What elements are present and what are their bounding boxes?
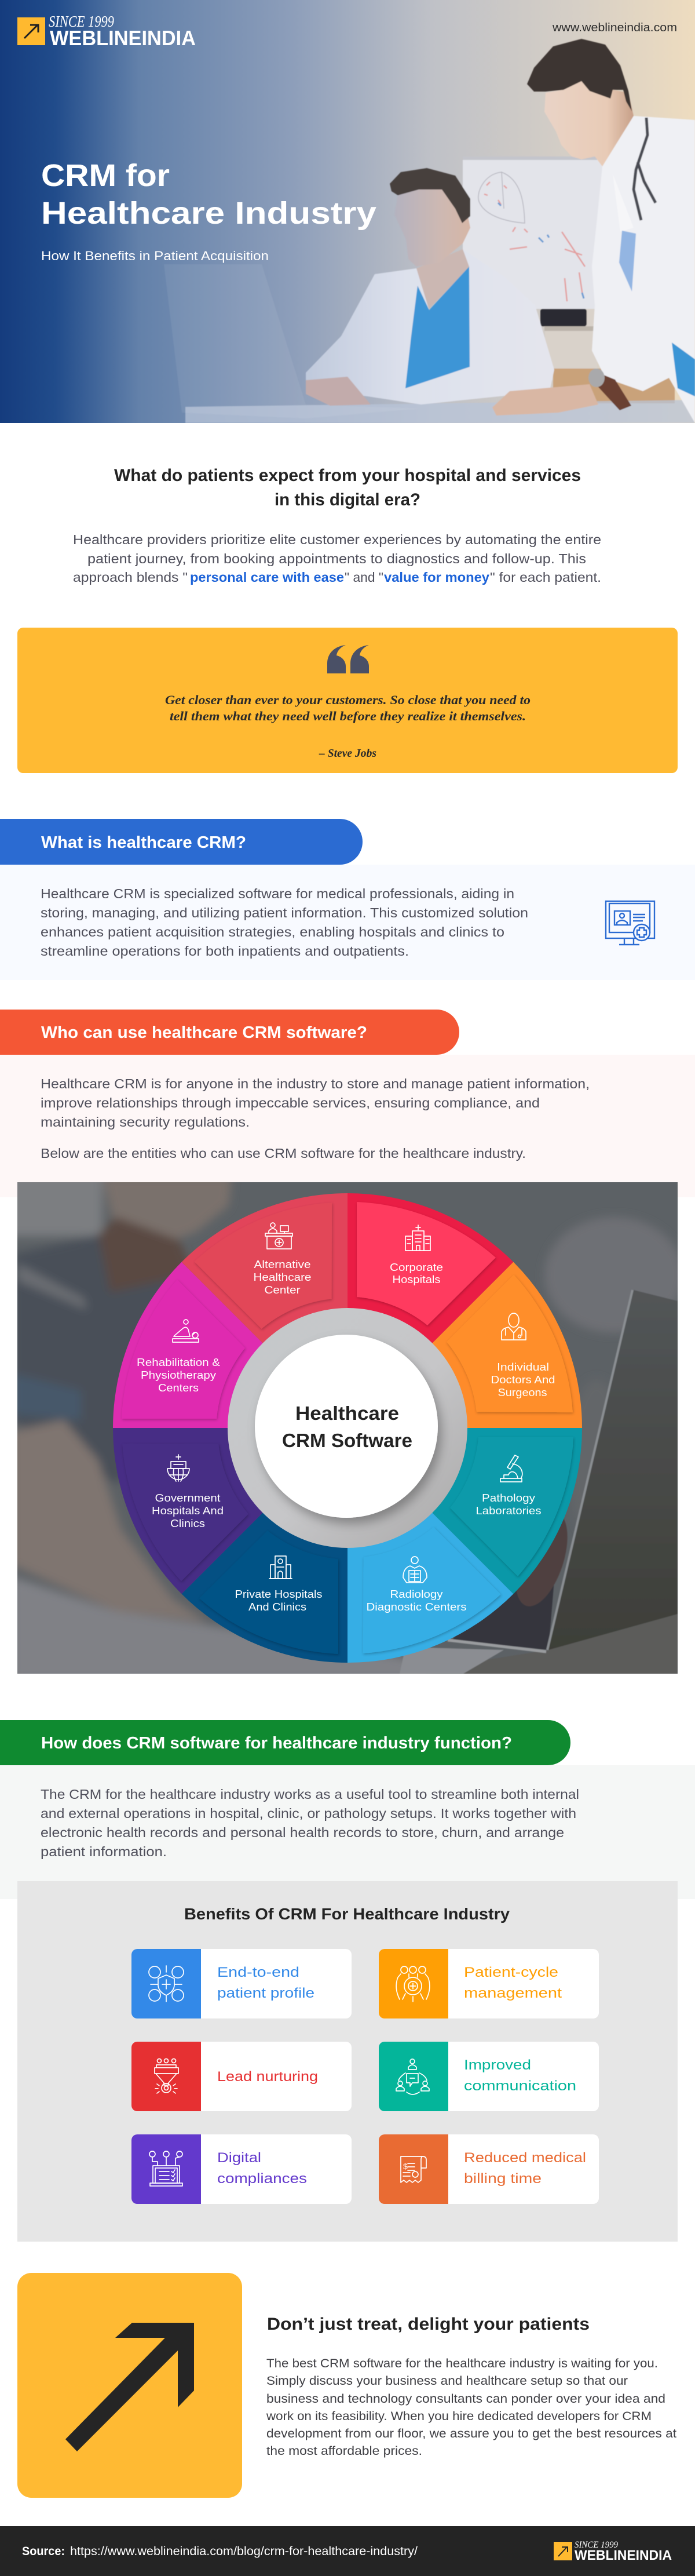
body text (41, 1076, 590, 1161)
intro heading (114, 466, 581, 509)
hub disc (255, 1335, 438, 1518)
icon: arrow (65, 2323, 194, 2451)
closing paragraph: the most affordable prices. (266, 2444, 422, 2458)
icon: lead funnel (155, 2058, 178, 2093)
photo backdrop: doctor with laptop (6, 1171, 683, 1681)
label: government hospitals and clinics (152, 1492, 224, 1529)
icon: quotation mark (327, 645, 369, 673)
body text: Healthcare CRM is for anyone in the industry to store and manage patient information, (41, 1076, 590, 1091)
body text: electronic health records and personal health records to store, churn, and arrange (41, 1825, 564, 1840)
wedge: private hospitals (182, 1428, 348, 1663)
panel: benefits of CRM (17, 1881, 678, 2242)
logo wordmark (49, 16, 195, 45)
body text: Below are the entities who can use CRM software for the healthcare industry. (41, 1146, 526, 1161)
footer logo wordmark (575, 2540, 672, 2563)
intro paragraph: value for money (384, 570, 489, 585)
card text: compliances (217, 2171, 307, 2187)
label: alternative healthcare center: Center (264, 1284, 301, 1296)
heading pill (0, 1720, 570, 1765)
panel: who can use healthcare CRM (0, 1010, 695, 1197)
label: private hospitals and clinics: Private Hospitals (235, 1588, 322, 1600)
label: pathology laboratories (476, 1492, 541, 1517)
card text (464, 1965, 562, 2001)
wedge: government (113, 1428, 348, 1594)
card text: billing time (464, 2171, 542, 2187)
closing paragraph: business and technology consultants can ponder over your idea and (266, 2392, 665, 2406)
body text: streamline operations for both inpatients and outpatients. (41, 943, 409, 959)
card: reduced medical billing time (379, 2134, 599, 2204)
intro heading: What do patients expect from your hospital and services (114, 466, 581, 485)
closing paragraph: Simply discuss your business and healthcare setup so that our (266, 2374, 628, 2388)
label: radiology diagnostic centers (366, 1588, 467, 1613)
card text (217, 1965, 314, 2001)
hero title: Healthcare Industry (41, 196, 376, 231)
footer logo tile (554, 2542, 572, 2560)
footer logo wordmark: SINCE 1999 (575, 2540, 618, 2550)
hero title: CRM for (41, 158, 170, 193)
intro heading: in this digital era? (275, 490, 420, 509)
wheel chart: healthcare CRM software (83, 1163, 612, 1693)
intro paragraph: Healthcare providers prioritize elite customer experiences by automating the entire (73, 532, 601, 547)
footer logo wordmark: WEBLINEINDIA (575, 2548, 672, 2563)
section heading: What is healthcare CRM? (41, 833, 246, 852)
card text: Lead nurturing (217, 2069, 318, 2085)
wedge: individual doctors (348, 1262, 582, 1428)
body text: enhances patient acquisition strategies, enabling hospitals and clinics to (41, 924, 504, 939)
label: rehabilitation and physiotherapy centers: Centers (158, 1382, 199, 1394)
label: alternative healthcare center (254, 1259, 312, 1296)
label: individual doctors and surgeons: Surgeons (498, 1387, 547, 1398)
panel: what is healthcare CRM (0, 819, 695, 980)
label: pathology laboratories: Pathology (482, 1492, 535, 1504)
logo: yellow arrow tile (17, 17, 45, 45)
card text (464, 2057, 576, 2094)
panel: yellow arrow tile (17, 2273, 242, 2498)
card: end-to-end patient profile (131, 1949, 352, 2018)
card: improved communication (379, 2042, 599, 2111)
heading pill (0, 819, 363, 865)
label: individual doctors and surgeons (491, 1361, 555, 1398)
body text: maintaining security regulations. (41, 1114, 250, 1129)
card text: End-to-end (217, 1965, 299, 1980)
benefits heading: Benefits Of CRM For Healthcare Industry (184, 1905, 510, 1923)
card: digital compliances (131, 2134, 352, 2204)
panel: how CRM functions (0, 1720, 695, 1899)
card: lead nurturing (131, 2042, 352, 2111)
icon: digital checklist laptop (149, 2151, 182, 2186)
body text: storing, managing, and utilizing patient information. This customized solution (41, 905, 528, 920)
label: individual doctors and surgeons: Doctors And (491, 1374, 555, 1386)
source url: https://www.weblineindia.com/blog/crm-for-healthcare-industry/ (70, 2545, 418, 2558)
body text: improve relationships through impeccable services, ensuring compliance, and (41, 1095, 540, 1110)
label: government hospitals and clinics: Clinics (170, 1518, 205, 1529)
hero photo: doctors at a laptop (164, 39, 695, 423)
body text: Healthcare CRM is specialized software for medical professionals, aiding in (41, 886, 514, 901)
body text (41, 886, 528, 959)
quote attribution: – Steve Jobs (319, 747, 376, 760)
card: patient-cycle management (379, 1949, 599, 2018)
label: alternative healthcare center: Healthcare (254, 1271, 312, 1283)
intro paragraph: " for each patient. (490, 570, 601, 585)
hub ring (228, 1308, 467, 1548)
intro paragraph: personal care with ease (190, 570, 344, 585)
icon: patient network (149, 1966, 184, 2002)
wedge: alternative healthcare (182, 1193, 348, 1428)
source label: Source: (22, 2545, 65, 2558)
logo wordmark: SINCE 1999 (49, 13, 114, 30)
hub title: CRM Software (282, 1430, 412, 1451)
label: alternative healthcare center: Alternative (254, 1259, 310, 1270)
card text: management (464, 1985, 562, 2001)
closing paragraph (266, 2357, 676, 2458)
card text (464, 2150, 586, 2187)
website url: www.weblineindia.com (552, 21, 677, 34)
card text: Patient-cycle (464, 1965, 558, 1980)
closing paragraph: The best CRM software for the healthcare industry is waiting for you. (266, 2357, 658, 2370)
label: rehabilitation and physiotherapy centers: Rehabilitation & (137, 1357, 220, 1368)
label: individual doctors and surgeons: Individual (497, 1361, 549, 1373)
closing paragraph: work on its feasibility. When you hire dedicated developers for CRM (266, 2410, 652, 2423)
card text: Reduced medical (464, 2150, 586, 2166)
wedge: corporate hospitals (348, 1193, 513, 1428)
quote text (165, 693, 531, 723)
body text: The CRM for the healthcare industry works as a useful tool to streamline both internal (41, 1787, 579, 1802)
card text: communication (464, 2078, 576, 2094)
logo wordmark: WEBLINEINDIA (50, 26, 196, 50)
label: government hospitals and clinics: Government (155, 1492, 220, 1504)
icon: radiologist (403, 1557, 427, 1583)
icon: doctor (502, 1313, 526, 1340)
label: private hospitals and clinics: And Clinics (248, 1601, 306, 1613)
icon: microscope (500, 1455, 522, 1482)
label: rehabilitation and physiotherapy centers: Physiotherapy (141, 1369, 216, 1381)
label: corporate hospitals: Corporate (390, 1262, 443, 1273)
icon: physiotherapy (173, 1320, 199, 1342)
intro paragraph (73, 532, 601, 585)
intro paragraph: " and " (345, 570, 383, 585)
wedge: rehabilitation (113, 1262, 348, 1428)
card text (217, 2150, 307, 2187)
icon: patient record monitor (606, 901, 654, 945)
body text: and external operations in hospital, clinic, or pathology setups. It works together with (41, 1806, 576, 1821)
intro paragraph: patient journey, from booking appointments to diagnostics and follow-up. This (87, 551, 586, 566)
icon: team communication (396, 2059, 429, 2094)
hero banner (0, 0, 695, 423)
label: radiology diagnostic centers: Radiology (390, 1588, 442, 1600)
hero subtitle: How It Benefits in Patient Acquisition (41, 249, 269, 263)
card text: Improved (464, 2057, 531, 2073)
body text (41, 1787, 579, 1859)
panel: quote (17, 628, 678, 773)
heading pill (0, 1010, 459, 1055)
closing heading: Don’t just treat, delight your patients (267, 2315, 590, 2334)
intro paragraph: approach blends " (73, 570, 188, 585)
body text: patient information. (41, 1844, 167, 1859)
icon: government globe (167, 1455, 189, 1481)
closing paragraph: development from our floor, we assure you to get the best resources at (266, 2427, 676, 2440)
icon: private hospital (269, 1556, 292, 1579)
label: corporate hospitals: Hospitals (393, 1274, 440, 1285)
hub title (282, 1402, 412, 1451)
quote text: tell them what they need well before they realize it themselves. (170, 709, 526, 723)
icon: billing receipt (401, 2156, 426, 2183)
section heading: Who can use healthcare CRM software? (41, 1023, 367, 1042)
quote text: Get closer than ever to your customers. So close that you need to (165, 693, 531, 707)
wedge: pathology (348, 1428, 582, 1594)
icon: patient cycle gear (396, 1966, 430, 2002)
card text: Digital (217, 2150, 261, 2166)
icon: reception desk (265, 1223, 292, 1249)
icon: billing receipt: $ (403, 2162, 408, 2171)
label: rehabilitation and physiotherapy centers (137, 1357, 220, 1394)
section heading: How does CRM software for healthcare industry function? (41, 1734, 512, 1752)
inner panels (83, 1163, 612, 1693)
label: corporate hospitals (390, 1262, 443, 1285)
label: pathology laboratories: Laboratories (476, 1505, 541, 1517)
hub title: Healthcare (295, 1402, 399, 1424)
icon: hospital tower (405, 1225, 430, 1251)
card text: patient profile (217, 1985, 314, 2001)
label: private hospitals and clinics (235, 1588, 322, 1613)
wedge: radiology (348, 1428, 513, 1663)
label: radiology diagnostic centers: Diagnostic Centers (366, 1601, 467, 1613)
footer (0, 2526, 695, 2576)
hero title (41, 158, 376, 231)
label: government hospitals and clinics: Hospitals And (152, 1505, 224, 1517)
